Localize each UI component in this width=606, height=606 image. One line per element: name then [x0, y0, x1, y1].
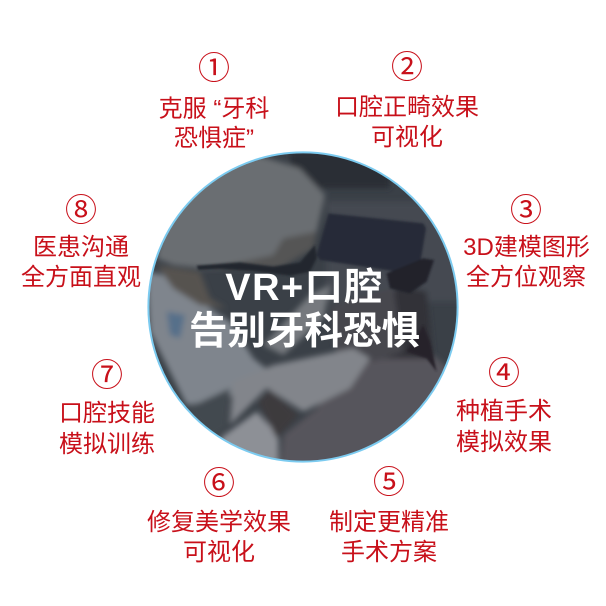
- item 8: [21, 192, 141, 291]
- item 6: ⑥: [203, 465, 235, 501]
- item 6: 可视化: [183, 539, 255, 566]
- item 3: 3D建模图形: [463, 234, 590, 261]
- item 4: 模拟效果: [456, 429, 552, 456]
- item 4: [456, 355, 552, 456]
- center title: [189, 267, 420, 353]
- item 5: ⑤: [373, 464, 405, 500]
- item 7: 模拟训练: [59, 431, 155, 458]
- item 8: ⑧: [65, 192, 97, 228]
- circle border: [148, 152, 458, 462]
- center title: 告别牙科恐惧: [189, 310, 420, 353]
- item 6: 修复美学效果: [147, 509, 291, 536]
- item 1: 恐惧症”: [174, 125, 254, 152]
- item 3: [463, 192, 590, 291]
- item 7: 口腔技能: [59, 400, 155, 427]
- item 3: 全方位观察: [466, 264, 586, 291]
- item 2: [335, 49, 479, 151]
- item 5: 手术方案: [341, 539, 437, 566]
- item 2: 口腔正畸效果: [335, 94, 479, 121]
- item 4: ④: [488, 355, 520, 391]
- item 3: ③: [510, 192, 542, 228]
- item 5: [329, 464, 449, 566]
- item 1: 克服 “牙科: [159, 96, 269, 122]
- item 8: 全方面直观: [21, 264, 141, 291]
- item 7: ⑦: [91, 357, 123, 393]
- item 6: [147, 465, 291, 566]
- center title: VR+口腔: [225, 267, 384, 309]
- item 1: ①: [198, 50, 230, 86]
- item 7: [59, 357, 155, 458]
- item 5: 制定更精准: [329, 509, 449, 536]
- item 2: 可视化: [371, 124, 443, 151]
- central photo circle: [147, 151, 459, 463]
- item 4: 种植手术: [456, 398, 552, 425]
- item 1: [159, 50, 269, 152]
- item 8: 医患沟通: [33, 234, 129, 261]
- item 2: ②: [391, 49, 423, 85]
